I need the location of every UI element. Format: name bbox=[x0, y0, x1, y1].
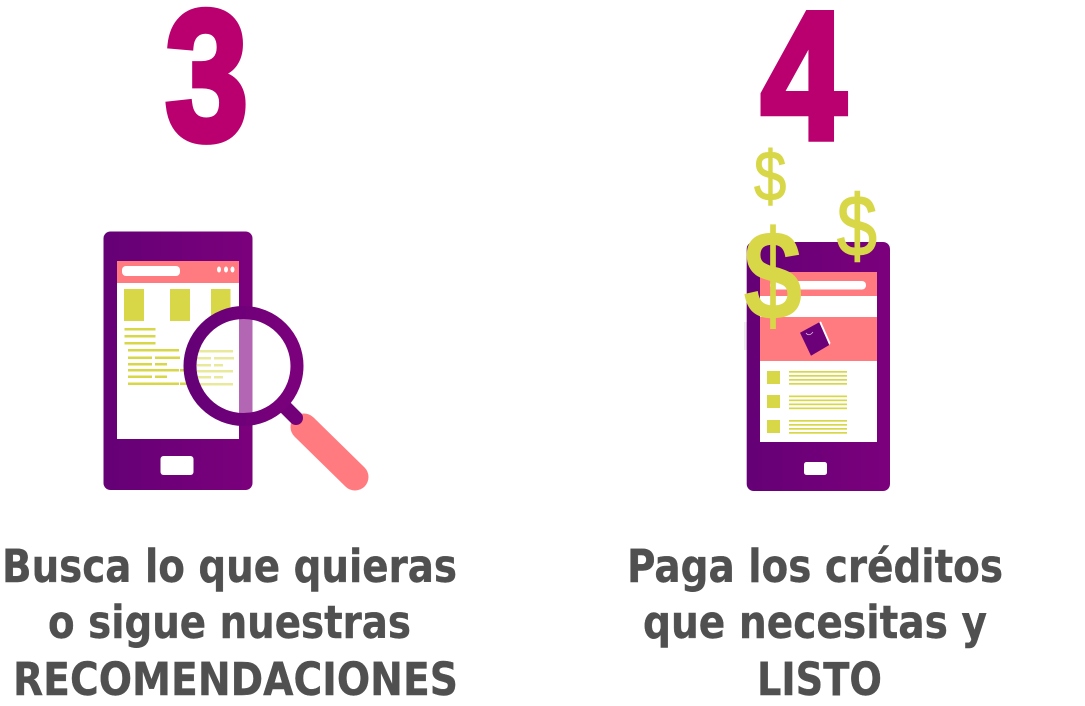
icon: phone with magnifying glass bbox=[104, 232, 355, 490]
phone home button bbox=[804, 462, 827, 475]
faint edge mark bbox=[744, 322, 747, 350]
phone body bbox=[747, 242, 890, 491]
small dollar sign: $ bbox=[754, 136, 786, 216]
large dollar sign: $ bbox=[743, 204, 803, 348]
magnifier lens interior bbox=[194, 316, 294, 416]
magnifier handle bbox=[304, 427, 355, 477]
caption: step 3: o sigue nuestras bbox=[48, 596, 411, 649]
product thumbnails bbox=[124, 289, 230, 321]
caption: step 3: RECOMENDACIONES bbox=[13, 653, 458, 706]
phone screen bbox=[117, 261, 239, 439]
screen header bar bbox=[117, 261, 239, 283]
medium dollar sign: $ bbox=[837, 177, 877, 274]
search pill bbox=[770, 281, 866, 290]
magnifier neck bbox=[284, 406, 296, 418]
icon: phone payment with dollar signs bbox=[743, 136, 890, 491]
caption: step 3: Busca lo que quieras bbox=[2, 540, 457, 593]
phone home button bbox=[160, 456, 194, 475]
phone screen bbox=[760, 272, 877, 442]
phone body bbox=[104, 232, 252, 490]
text lines on screen bbox=[124, 328, 190, 385]
lens: phone edge seen through glass bbox=[239, 316, 252, 416]
screen header bar bbox=[760, 272, 877, 296]
caption: step 4: LISTO bbox=[757, 653, 882, 706]
caption: step 4: Paga los créditos bbox=[627, 540, 1003, 593]
list items bbox=[767, 371, 847, 434]
caption: step 3 bbox=[2, 540, 458, 706]
caption: step 4 bbox=[627, 540, 1003, 706]
magnifier ring bbox=[190, 312, 297, 420]
lens: lines seen through glass bbox=[197, 350, 234, 386]
caption: step 4: que necesitas y bbox=[643, 596, 987, 649]
shopping bag bbox=[800, 322, 830, 356]
banner bbox=[760, 317, 877, 361]
